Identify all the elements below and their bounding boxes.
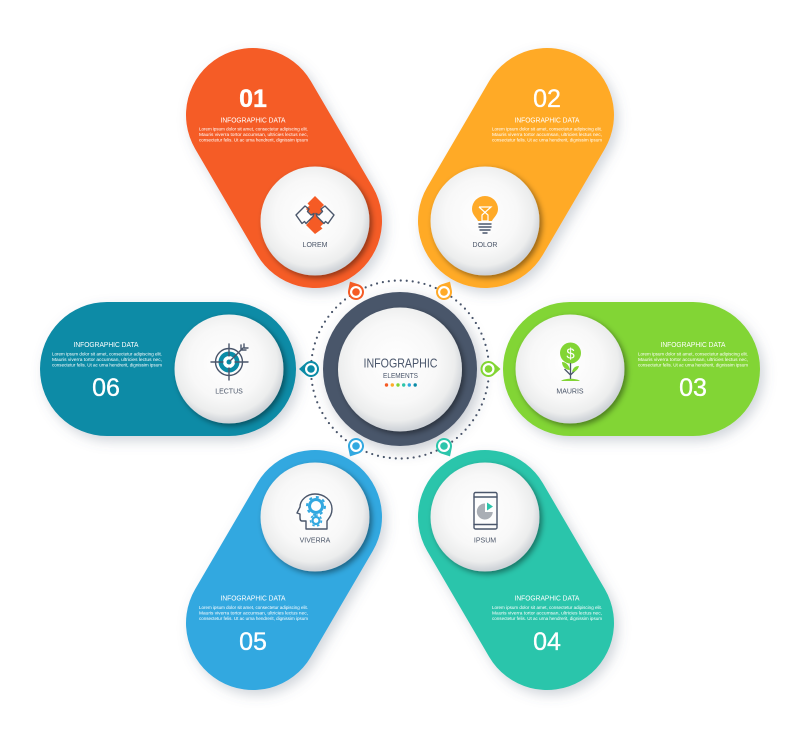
dotted orbit ring — [311, 280, 489, 458]
label DOLOR: DOLOR — [473, 242, 497, 249]
icon: phone with pie chart — [474, 492, 497, 529]
number 03: 03 — [679, 374, 707, 402]
body text 02 — [492, 126, 602, 142]
icon: money plant — [560, 342, 581, 381]
center: sphere — [338, 308, 462, 432]
icon: head with gears — [297, 494, 332, 529]
number 06: 06 — [92, 374, 120, 402]
marker 05 — [343, 435, 367, 460]
body text 01 — [199, 126, 308, 142]
body text 04 — [492, 605, 602, 621]
body text 05: consectetur felis. Ut ac urna hendrerit, dignissim ipsum — [199, 616, 308, 621]
body text 06: consectetur felis. Ut ac urna hendrerit, dignissim ipsum — [52, 362, 162, 368]
heading 04: INFOGRAPHIC DATA — [514, 596, 580, 602]
marker 03 — [481, 361, 500, 377]
body text 01: Mauris viverra tortor accumsan, ultricies lectus nec, — [199, 132, 308, 137]
body text 06: Lorem ipsum dolor sit amet, consectetur adipiscing elit. — [52, 352, 162, 356]
center: title: INFOGRAPHIC — [364, 356, 438, 370]
heading 01: INFOGRAPHIC DATA — [220, 118, 286, 124]
body text 03: consectetur felis. Ut ac urna hendrerit, dignissim ipsum — [638, 362, 748, 368]
body text 05 — [199, 605, 308, 621]
icon: puzzle — [296, 196, 334, 234]
body text 05: Mauris viverra tortor accumsan, ultricies lectus nec, — [199, 610, 308, 616]
heading 06: INFOGRAPHIC DATA — [74, 342, 139, 349]
sphere 06 — [174, 314, 284, 424]
number 04: 04 — [533, 628, 561, 656]
sphere 03 — [516, 314, 624, 424]
number 02: 02 — [533, 85, 561, 113]
sphere 01 — [260, 166, 370, 276]
petal shape 05 — [253, 517, 315, 623]
center: colour dots — [385, 383, 417, 387]
body text 06: Mauris viverra tortor accumsan, ultricies lectus nec, — [52, 357, 162, 362]
panel: step 04 — [430, 462, 602, 656]
body text 04: consectetur felis. Ut ac urna hendrerit, dignissim ipsum — [492, 616, 602, 621]
petal shape 02 — [485, 115, 547, 221]
body text 02: Mauris viverra tortor accumsan, ultricies lectus nec, — [492, 132, 602, 137]
body text 05: Lorem ipsum dolor sit amet, consectetur adipiscing elit. — [199, 605, 308, 610]
heading 02: INFOGRAPHIC DATA — [514, 118, 580, 124]
petal shape 03 — [570, 302, 693, 436]
center: subtitle: ELEMENTS — [383, 371, 418, 380]
petal shape 01 — [253, 115, 315, 221]
center: dark ring — [323, 292, 477, 446]
label VIVERRA: VIVERRA — [300, 538, 331, 544]
sphere 02 — [430, 166, 540, 276]
heading 03: INFOGRAPHIC DATA — [660, 342, 726, 349]
panel: step 06 — [52, 314, 284, 424]
marker 04 — [433, 435, 457, 460]
marker 02 — [433, 278, 457, 303]
number 05: 05 — [239, 628, 267, 656]
panel: step 02 — [430, 85, 602, 276]
body text 03: Mauris viverra tortor accumsan, ultricies lectus nec, — [638, 357, 748, 362]
marker 06 — [299, 361, 319, 377]
body text 06 — [52, 352, 162, 368]
body text 01: consectetur felis. Ut ac urna hendrerit, dignissim ipsum — [199, 138, 308, 142]
icon: money plant: $ — [566, 346, 575, 362]
label LECTUS: LECTUS — [215, 388, 243, 396]
label MAURIS: MAURIS — [556, 388, 584, 396]
body text 02: Lorem ipsum dolor sit amet, consectetur adipiscing elit. — [492, 126, 602, 132]
heading 05: INFOGRAPHIC DATA — [220, 596, 286, 602]
number 01: 01 — [239, 85, 267, 113]
body text 03 — [638, 352, 748, 368]
body text 02: consectetur felis. Ut ac urna hendrerit, dignissim ipsum — [492, 138, 602, 142]
panel: step 05 — [199, 462, 370, 656]
panel: step 01 — [199, 85, 370, 276]
icon: target — [211, 344, 248, 380]
petal shape 06 — [107, 302, 229, 436]
marker 01 — [343, 278, 367, 303]
label IPSUM: IPSUM — [474, 538, 496, 544]
sphere 05 — [260, 462, 370, 572]
body text 01: Lorem ipsum dolor sit amet, consectetur adipiscing elit. — [199, 126, 308, 132]
icon: light bulb — [472, 196, 498, 233]
petal shape 04 — [485, 517, 547, 623]
sphere 04 — [430, 462, 540, 572]
panel: step 03 — [516, 314, 748, 424]
label LOREM: LOREM — [303, 242, 328, 249]
body text 04: Lorem ipsum dolor sit amet, consectetur adipiscing elit. — [492, 605, 602, 610]
body text 04: Mauris viverra tortor accumsan, ultricies lectus nec, — [492, 610, 602, 616]
body text 03: Lorem ipsum dolor sit amet, consectetur adipiscing elit. — [638, 352, 748, 356]
